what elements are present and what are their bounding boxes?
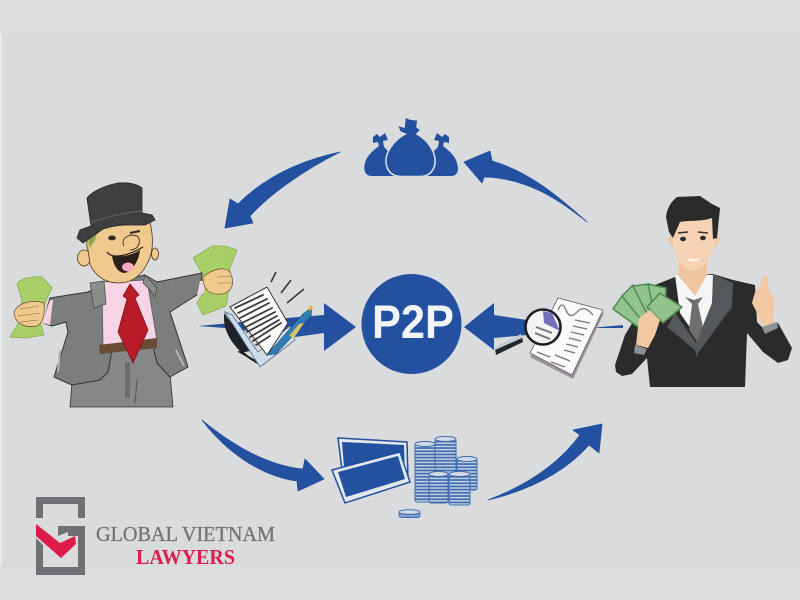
icon: banknotes <box>332 438 410 503</box>
icon: cash left hand <box>10 277 52 338</box>
lender belt <box>99 338 157 354</box>
lender jacket <box>43 273 202 385</box>
figure: lender with top hat <box>10 183 237 407</box>
icon: money bags <box>364 117 458 176</box>
arrow: lender to P2P <box>198 303 356 351</box>
arrow: top right curved <box>464 151 587 222</box>
left bag <box>364 133 395 176</box>
right bag <box>427 133 458 176</box>
P2P circle <box>362 274 462 374</box>
borrower hair <box>666 196 720 239</box>
arrow: bottom left curved <box>202 420 324 491</box>
logo: Global Vietnam Lawyers <box>36 497 275 575</box>
arrow: top left curved <box>225 152 340 228</box>
icon: document with magnifier <box>495 298 604 379</box>
borrower tie <box>685 297 704 343</box>
P2P circle: P2P <box>372 295 454 348</box>
arrow: borrower to P2P <box>464 303 623 350</box>
logo mark <box>36 497 85 575</box>
icon: coin stacks <box>399 436 477 518</box>
borrower shirt <box>675 275 715 342</box>
icon: cash and coin stacks <box>332 436 477 518</box>
lender trousers <box>70 340 173 407</box>
lender cuffs and hands <box>42 281 206 325</box>
borrower lapels <box>667 274 733 358</box>
lender shirt <box>102 280 157 345</box>
icon: cash right hand <box>193 246 237 315</box>
borrower neck and face <box>668 214 720 296</box>
borrower jacket <box>615 274 792 387</box>
icon: contract and pen <box>225 272 312 367</box>
icon: magnifier <box>495 310 560 355</box>
logo wordmark: GLOBAL VIETNAM <box>96 522 275 546</box>
lender top hat <box>77 183 155 243</box>
arrow: bottom right curved <box>488 424 602 500</box>
lender lapels <box>90 275 157 308</box>
logo subtitle: LAWYERS <box>136 545 235 569</box>
centre bag <box>386 117 435 176</box>
borrower thumbs-up hand <box>752 275 775 327</box>
lender tie <box>118 284 148 363</box>
icon: banknotes fan <box>613 284 682 327</box>
borrower left hand and cuff <box>636 310 660 348</box>
lender head <box>78 222 158 283</box>
figure: borrower in suit <box>613 196 792 387</box>
